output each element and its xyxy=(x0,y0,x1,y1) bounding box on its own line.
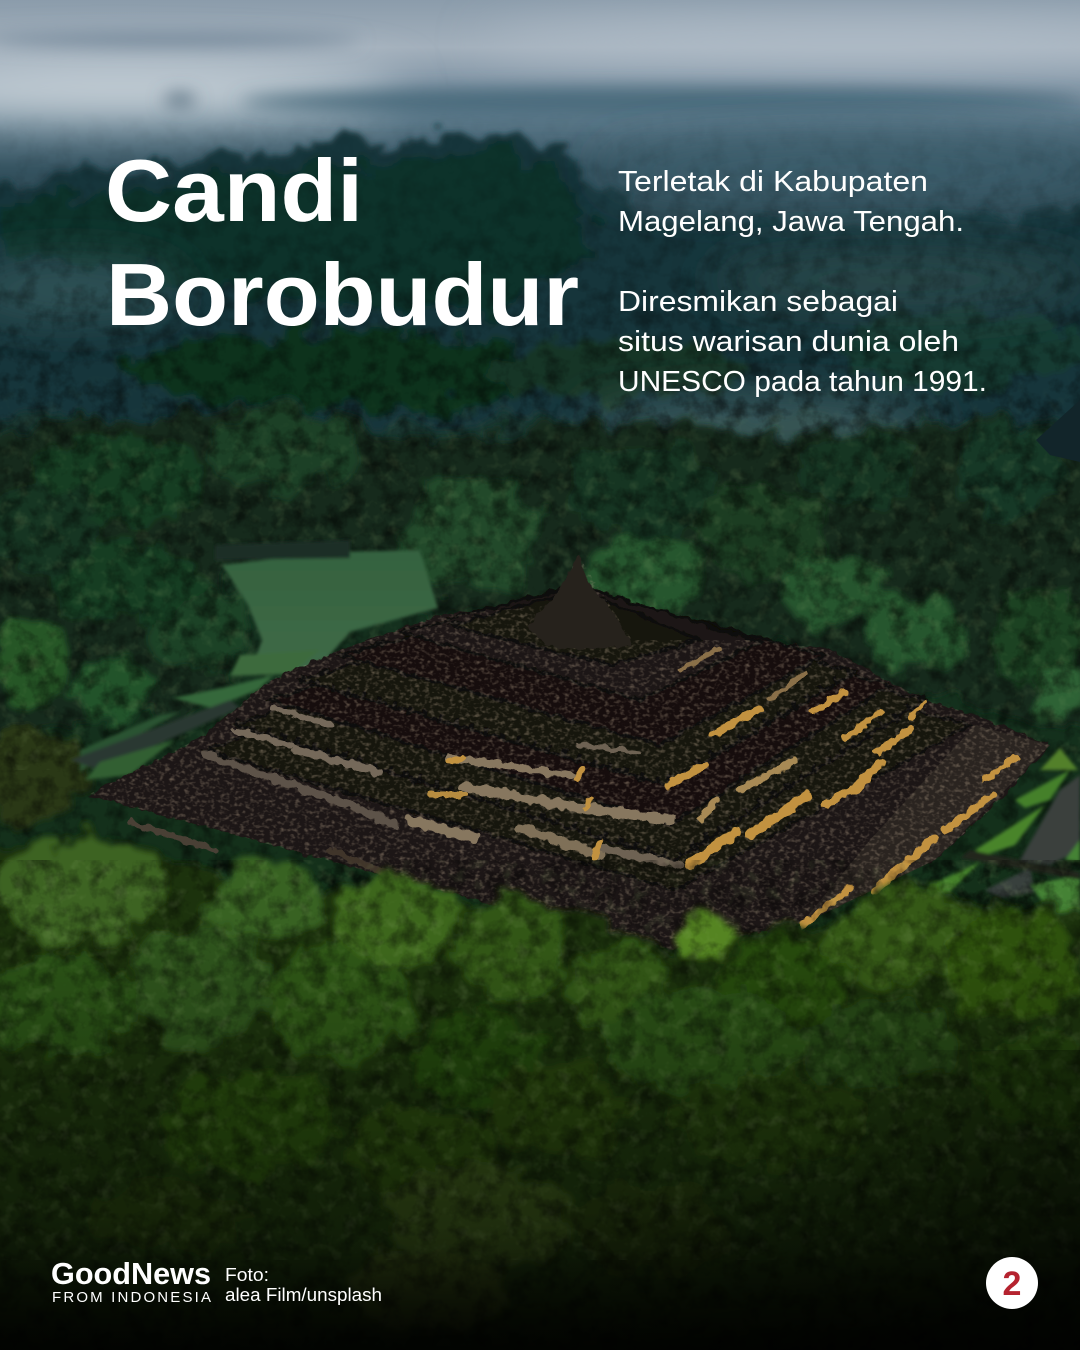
dark roof at right edge xyxy=(1036,400,1080,462)
morning mist xyxy=(0,22,1080,118)
foreground tree canopy xyxy=(0,835,1080,1350)
golden lit stripes on right face xyxy=(430,648,1015,925)
page number badge: 2 xyxy=(1003,1265,1021,1303)
foreground leaf shadows xyxy=(0,860,1080,1350)
description: UNESCO status: UNESCO pada tahun 1991. xyxy=(618,366,987,398)
photo credit: Foto: xyxy=(225,1265,269,1285)
logo: GoodNews from Indonesia: GoodNews xyxy=(51,1256,211,1291)
description: UNESCO status: Diresmikan sebagai xyxy=(618,286,898,318)
temple stone texture xyxy=(80,550,1060,955)
outer right terrace xyxy=(800,725,1050,925)
description: UNESCO status: situs warisan dunia oleh xyxy=(618,326,959,358)
hazy valley xyxy=(0,140,1080,445)
bottom dark vignette xyxy=(0,950,1080,1350)
title: Candi xyxy=(105,141,363,240)
grey lit stripes on left face xyxy=(130,708,680,880)
logo: GoodNews from Indonesia xyxy=(51,1256,211,1306)
middle forest xyxy=(0,405,1080,823)
description: UNESCO status xyxy=(618,286,987,398)
description: location xyxy=(618,166,964,238)
lawn and terraces xyxy=(70,540,1080,925)
temple base platform xyxy=(88,600,1050,950)
description: location: Magelang, Jawa Tengah. xyxy=(618,206,964,238)
foreground leaf highlights xyxy=(0,860,1080,1260)
Borobudur temple xyxy=(80,550,1060,955)
bottom right shadow xyxy=(0,1050,1080,1350)
photo credit: alea Film/unsplash xyxy=(225,1285,382,1305)
distant forest silhouette xyxy=(0,135,1080,420)
temple small stupas along tiers xyxy=(235,670,925,858)
description: location: Terletak di Kabupaten xyxy=(618,166,928,198)
page number badge xyxy=(986,1257,1038,1309)
main stupa xyxy=(528,555,632,650)
temple tiers xyxy=(205,585,970,890)
photo credit xyxy=(225,1265,382,1305)
title: Borobudur xyxy=(106,245,579,344)
forest highlights and shadows xyxy=(0,155,1080,952)
logo: GoodNews from Indonesia: FROM INDONESIA xyxy=(52,1289,211,1306)
title xyxy=(105,141,579,344)
